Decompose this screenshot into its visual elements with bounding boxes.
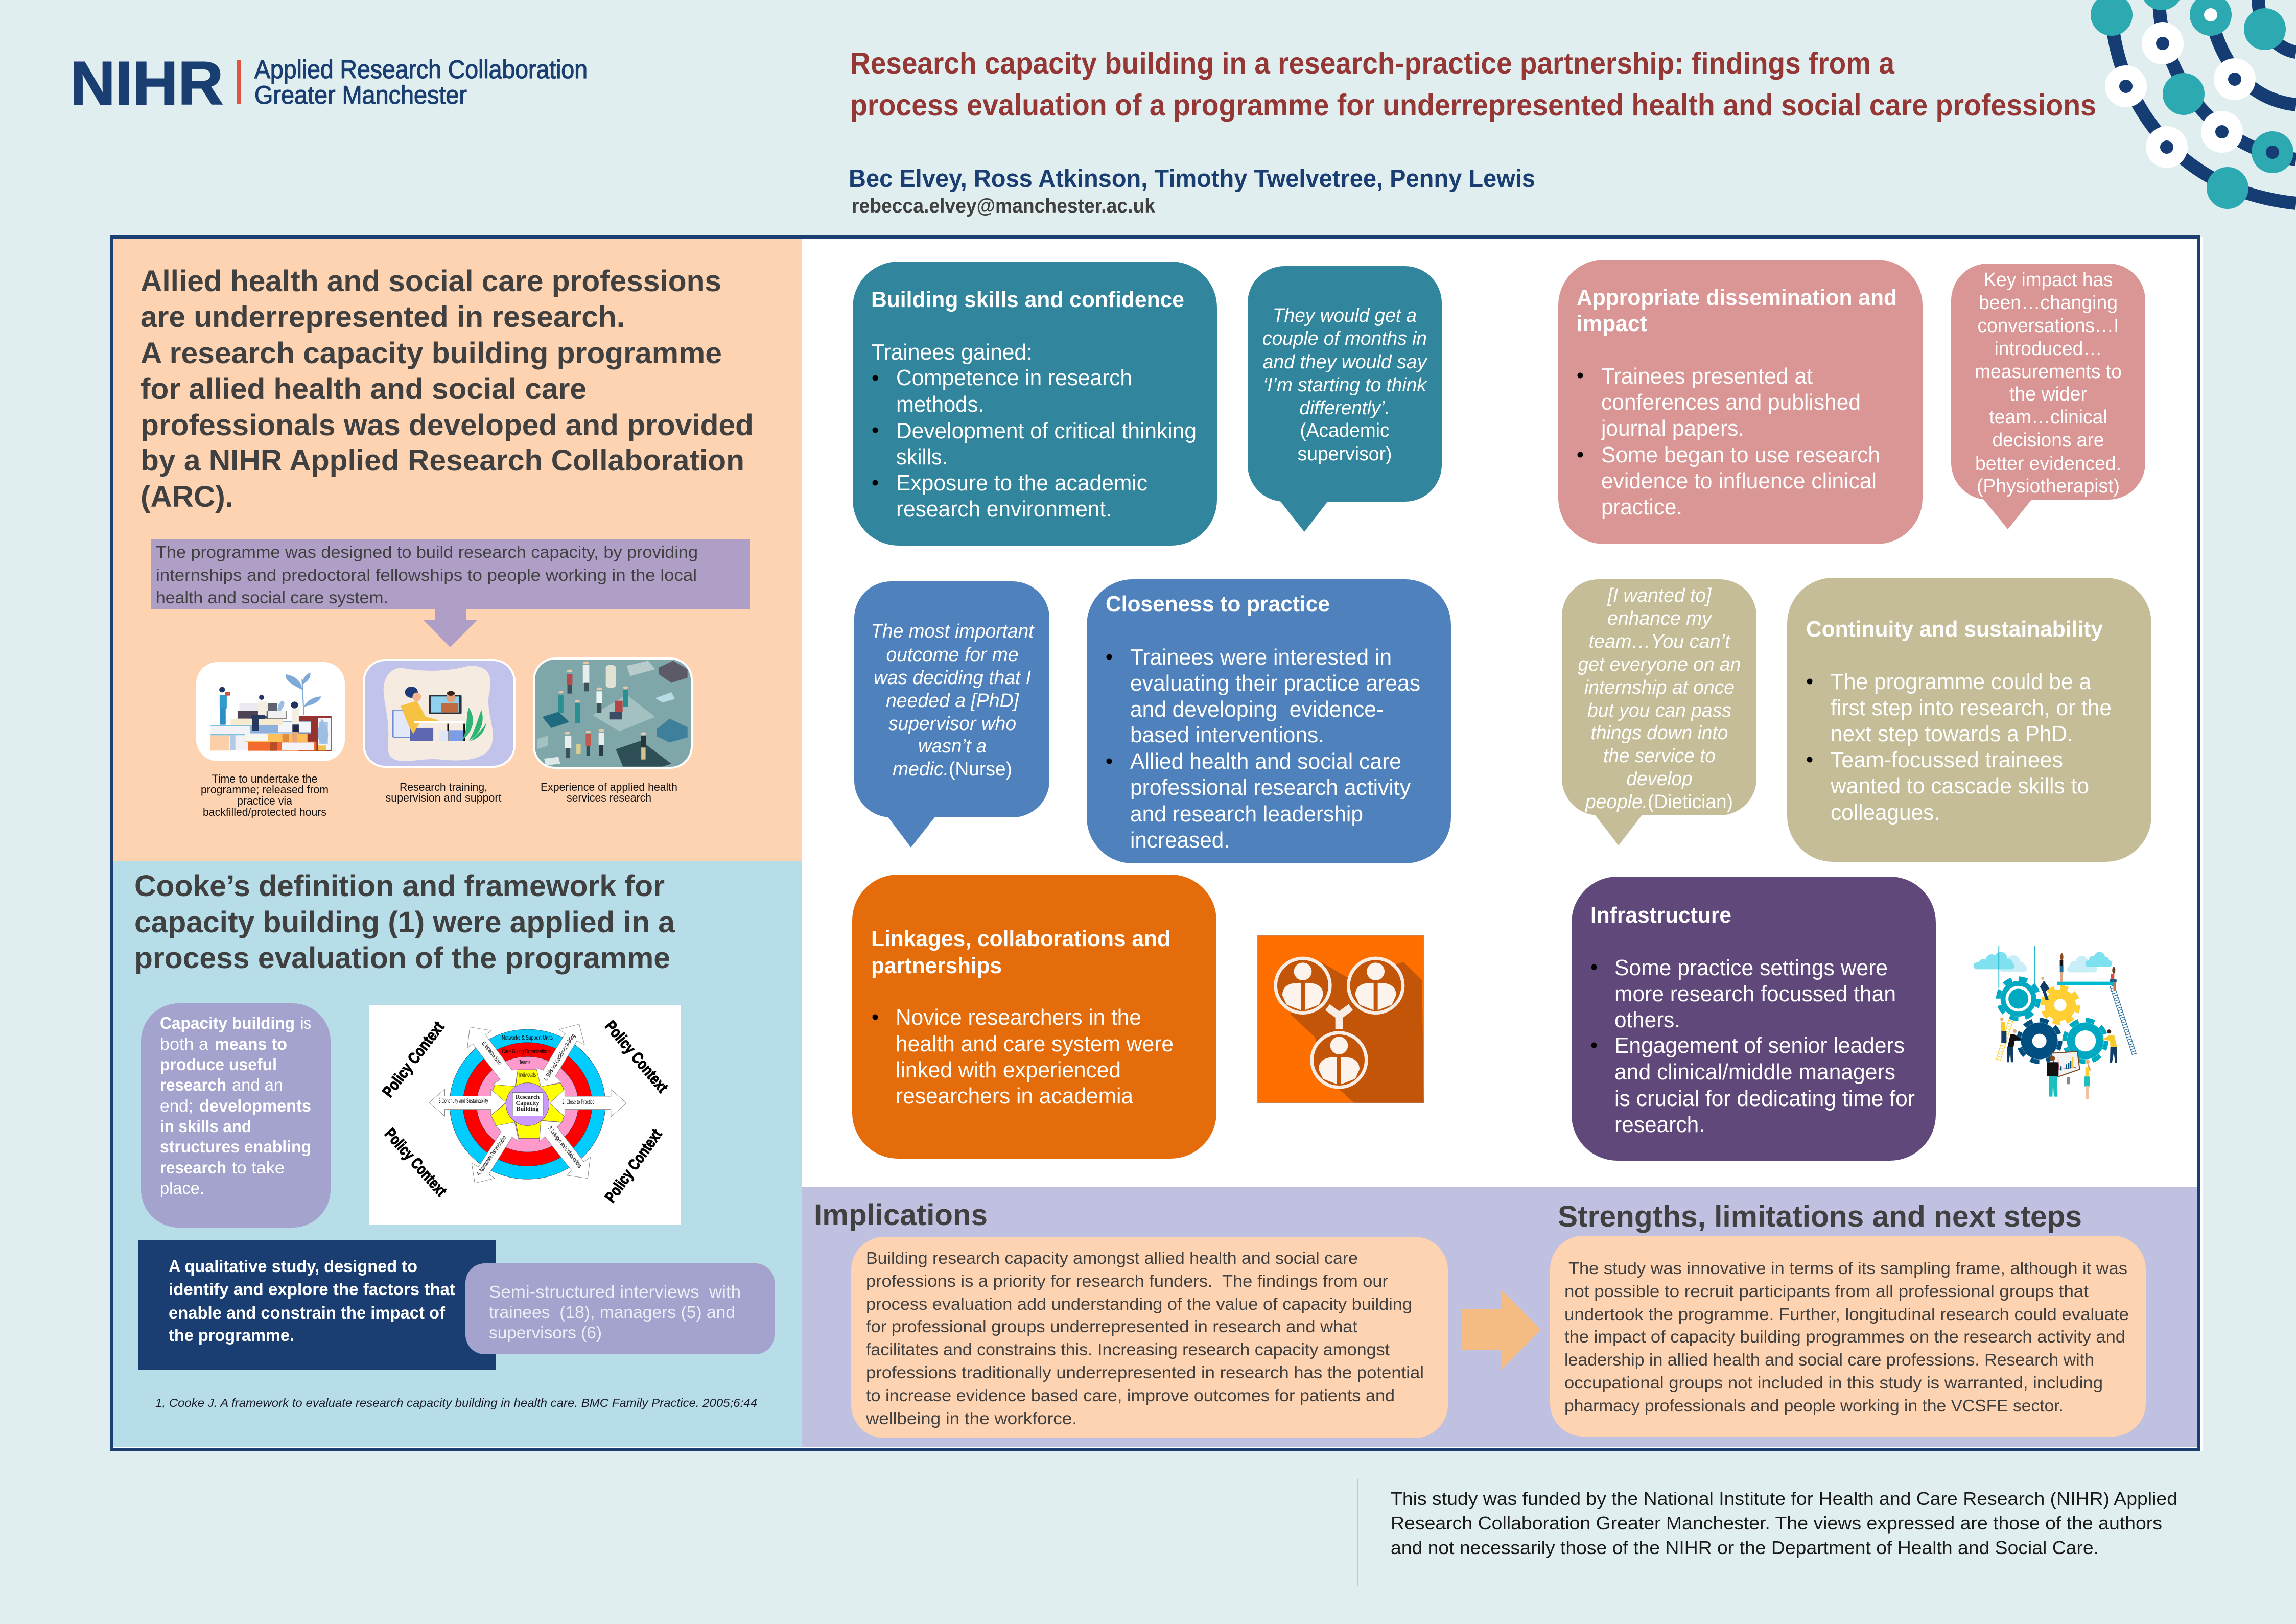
- callout: qualitative study: enable and constrain the impact of: [169, 1303, 446, 1322]
- panel: linkages, collaborations and partnerships: health and care system were: [896, 1032, 1174, 1056]
- quote bubble: nurse: (Nurse): [949, 759, 1012, 780]
- panel: closeness to practice: [1087, 579, 1451, 863]
- panel: infrastructure: more research focussed than: [1614, 982, 1896, 1006]
- heading: Cooke's definition: Cooke’s definition and framework for: [134, 869, 665, 903]
- reference: 1, Cooke J. A framework to evaluate research capacity building in health care. BMC Family Practice. 2005;6:44: [155, 1396, 757, 1409]
- panel: building skills and confidence: Development of critical thinking: [896, 419, 1197, 443]
- panel: building skills and confidence: methods.: [896, 392, 984, 417]
- quote bubble: academic supervisor: (Academic: [1300, 420, 1390, 441]
- diagram labels: [379, 1017, 672, 1206]
- panel: linkages, collaborations and partnerships: Linkages, collaborations and: [871, 927, 1170, 951]
- quote bubble: academic supervisor: supervisor): [1298, 443, 1392, 465]
- heading: Cooke's definition: capacity building (1) were applied in a: [134, 906, 675, 939]
- heading: underrepresentation: (ARC).: [140, 480, 233, 513]
- heading: strengths and limitations: Strengths, limitations and next steps: [1558, 1200, 2082, 1233]
- panel: appropriate dissemination and impact: practice.: [1601, 495, 1682, 520]
- panel: appropriate dissemination and impact: Some began to use research: [1601, 443, 1880, 467]
- panel: infrastructure: is crucial for dedicating time for: [1614, 1087, 1915, 1111]
- heading: underrepresentation: Allied health and social care professions: [140, 265, 721, 298]
- panel: infrastructure: Some practice settings were: [1614, 956, 1888, 980]
- panel: appropriate dissemination and impact: conferences and published: [1601, 390, 1861, 415]
- diagram labels: 3. Linkages and Collaborations: [547, 1125, 583, 1169]
- quote bubble: academic supervisor: They would get a: [1273, 305, 1417, 326]
- panel: continuity and sustainability: [1787, 578, 2151, 862]
- quote bubble: nurse: needed a [PhD]: [886, 690, 1019, 712]
- caption: training: [385, 781, 502, 804]
- callout: capacity building definition: Capacity building: [160, 1014, 295, 1032]
- text block: strengths: the impact of capacity building programmes on the research activity and: [1564, 1327, 2125, 1346]
- panel: continuity and sustainability: The programme could be a: [1831, 670, 2092, 694]
- quote bubble: nurse: [854, 581, 1049, 848]
- chart: Cooke framework diagram: [369, 1005, 681, 1225]
- panel: linkages, collaborations and partnerships: researchers in academia: [896, 1084, 1134, 1109]
- quote bubble: physiotherapist: [1951, 264, 2145, 529]
- callout: qualitative study: [138, 1240, 496, 1370]
- quote bubble: physiotherapist: Key impact has: [1983, 269, 2113, 291]
- heading: underrepresentation: [140, 265, 754, 513]
- text block: implications: wellbeing in the workforce.: [865, 1409, 1077, 1428]
- callout: capacity building definition: [141, 1003, 331, 1228]
- panel: infrastructure: research.: [1614, 1113, 1705, 1137]
- heading: underrepresentation: professionals was developed and provided: [140, 409, 754, 442]
- quote bubble: dietician: [I wanted to]: [1607, 585, 1712, 606]
- panel: closeness to practice: and developing evidence-: [1130, 697, 1384, 722]
- callout: capacity building definition: end;: [160, 1096, 193, 1115]
- quote bubble: nurse: outcome for me: [886, 644, 1019, 666]
- diagram labels: Building: [516, 1105, 539, 1112]
- callout: programme design: internships and predoctoral fellowships to people working in the local: [156, 566, 697, 584]
- text block: strengths: [1550, 1236, 2146, 1437]
- panel: building skills and confidence: Building skills and confidence: [871, 288, 1184, 312]
- quote bubble: academic supervisor: and they would say: [1263, 351, 1427, 373]
- quote bubble: academic supervisor: ‘I’m starting to think: [1263, 374, 1427, 396]
- funding statement: Research Collaboration Greater Manchester. The views expressed are those of the authors: [1391, 1513, 2162, 1534]
- arrow: down: [423, 609, 478, 647]
- quote bubble: physiotherapist: team…clinical: [1989, 407, 2107, 428]
- text block: implications: for professional groups underrepresented in research and what: [866, 1317, 1357, 1336]
- callout: capacity building definition: research: [160, 1075, 226, 1094]
- text block: implications: Building research capacity amongst allied health and social care: [866, 1249, 1358, 1267]
- panel: closeness to practice: and research leadership: [1130, 802, 1363, 827]
- heading: underrepresentation: A research capacity building programme: [140, 337, 722, 370]
- quote bubble: physiotherapist: the wider: [2009, 384, 2087, 405]
- diagram labels: Individuals: [519, 1071, 536, 1078]
- caption: time: Time to undertake the: [212, 772, 318, 785]
- text block: implications: professions traditionally underrepresented in research has the potential: [866, 1363, 1424, 1382]
- callout: qualitative study: identify and explore the factors that: [169, 1280, 455, 1299]
- callout: interviews: supervisors (6): [489, 1323, 602, 1342]
- quote bubble: dietician: enhance my: [1607, 608, 1713, 629]
- panel: closeness to practice: increased.: [1130, 828, 1230, 853]
- quote bubble: nurse: The most important: [871, 621, 1035, 642]
- quote bubble: nurse: wasn’t a: [918, 736, 987, 757]
- panel: appropriate dissemination and impact: evidence to influence clinical: [1601, 469, 1877, 493]
- diagram labels: Policy Context: [379, 1018, 448, 1100]
- caption: experience: [541, 781, 677, 804]
- panel: infrastructure: and clinical/middle managers: [1614, 1060, 1895, 1085]
- quote bubble: nurse: supervisor who: [888, 713, 1016, 735]
- heading: underrepresentation: are underrepresented in research.: [140, 300, 625, 334]
- diagram labels: 2. Close to Practice: [562, 1098, 595, 1105]
- panel: continuity and sustainability: next step towards a PhD.: [1831, 722, 2073, 746]
- panel: linkages, collaborations and partnerships: Novice researchers in the: [896, 1005, 1141, 1030]
- panel: closeness to practice: Closeness to practice: [1106, 592, 1330, 617]
- callout: capacity building definition: is: [300, 1014, 311, 1032]
- panel: infrastructure: others.: [1614, 1008, 1680, 1032]
- callout: programme design: [151, 539, 750, 609]
- panel: background and programme: [113, 239, 802, 861]
- diagram labels: Teams: [519, 1058, 530, 1066]
- quote bubble: physiotherapist: introduced…: [1995, 338, 2102, 360]
- diagram labels: Networks & Support Units: [502, 1034, 553, 1041]
- panel: linkages, collaborations and partnerships: linked with experienced: [896, 1058, 1121, 1082]
- callout: capacity building definition: means to: [215, 1034, 287, 1053]
- text block: strengths: leadership in allied health and social care professions. Research with: [1564, 1350, 2094, 1369]
- quote bubble: physiotherapist: conversations…I: [1977, 315, 2119, 337]
- caption: training: supervision and support: [385, 791, 502, 804]
- diagram labels: Policy Context: [601, 1126, 665, 1206]
- callout: interviews: trainees (18), managers (5) and: [489, 1303, 735, 1322]
- logo: NIHR Applied Research Collaboration: NIHR: [70, 49, 223, 117]
- panel: building skills and confidence: Trainees gained:: [871, 340, 1033, 365]
- callout: capacity building definition: developments: [199, 1096, 311, 1115]
- diagram labels: 4. Appropriate Dissemination: [475, 1134, 508, 1176]
- text block: strengths: The study was innovative in terms of its sampling frame, although it was: [1568, 1259, 2127, 1278]
- callout: capacity building definition: produce useful: [160, 1055, 277, 1074]
- diagram labels: Policy Context: [601, 1017, 672, 1096]
- title: [850, 46, 2096, 122]
- text block: strengths: undertook the programme. Further, longitudinal research could evaluate: [1564, 1305, 2129, 1324]
- panel: continuity and sustainability: Continuity and sustainability: [1806, 617, 2103, 642]
- panel: appropriate dissemination and impact: Appropriate dissemination and: [1577, 286, 1897, 310]
- quote bubble: academic supervisor: [1248, 266, 1442, 532]
- diagram labels: Capacity: [516, 1099, 540, 1107]
- panel: infrastructure: Engagement of senior leaders: [1614, 1033, 1905, 1058]
- funding statement: This study was funded by the National Institute for Health and Care Research (NIHR) Applied: [1391, 1488, 2177, 1509]
- callout: capacity building definition: both a: [160, 1034, 209, 1053]
- quote bubble: dietician: but you can pass: [1587, 700, 1731, 721]
- quote bubble: physiotherapist: (Physiotherapist): [1977, 476, 2120, 497]
- text block: implications: to increase evidence based care, improve outcomes for patients and: [866, 1386, 1395, 1405]
- quote bubble: dietician: get everyone on an: [1578, 654, 1741, 675]
- text block: implications: professions is a priority for research funders. The findings from our: [866, 1272, 1388, 1290]
- quote bubble: physiotherapist: decisions are: [1993, 430, 2104, 451]
- panel: implications and next steps: [802, 1187, 2197, 1447]
- contact email: rebecca.elvey@manchester.ac.uk: [852, 195, 1155, 217]
- callout: capacity building definition: research: [160, 1158, 226, 1177]
- caption: time: programme; released from: [201, 783, 329, 796]
- heading: underrepresentation: for allied health and social care: [140, 372, 587, 406]
- diagram labels: 1. Skills and Confidence Building: [542, 1032, 577, 1082]
- main frame: [111, 237, 2203, 1451]
- diagram labels: Research: [516, 1093, 540, 1100]
- callout: capacity building definition: place.: [160, 1179, 204, 1197]
- quote bubble: academic supervisor: couple of months in: [1262, 328, 1427, 349]
- quote bubble: dietician: internship at once: [1584, 677, 1735, 698]
- caption: time: practice via: [237, 794, 293, 807]
- callout: capacity building definition: structures enabling: [160, 1137, 311, 1156]
- icon: applied health services scene card: [534, 658, 692, 768]
- authors: Bec Elvey, Ross Atkinson, Timothy Twelvetree, Penny Lewis: [849, 165, 1535, 193]
- icon: linked people network: [1258, 935, 1424, 1103]
- title: process evaluation of a programme for underrepresented health and social care professions: [850, 88, 2096, 122]
- caption: experience: services research: [567, 791, 651, 804]
- diagram labels: Policy Context: [381, 1125, 451, 1199]
- text block: strengths: not possible to recruit participants from all professional groups that: [1564, 1282, 2089, 1301]
- panel: closeness to practice: professional research activity: [1130, 775, 1411, 800]
- quote bubble: dietician: people.: [1585, 791, 1648, 813]
- heading: Cooke's definition: process evaluation of the programme: [134, 942, 670, 975]
- quote bubble: dietician: the service to: [1603, 745, 1716, 767]
- quote bubble: dietician: develop: [1627, 768, 1692, 790]
- quote bubble: dietician: things down into: [1591, 722, 1728, 744]
- logo: NIHR Applied Research Collaboration: Applied Research Collaboration: [254, 55, 588, 84]
- panel: closeness to practice: evaluating their practice areas: [1130, 671, 1420, 696]
- panel: closeness to practice: based interventions.: [1130, 723, 1324, 747]
- caption: training: Research training,: [400, 781, 487, 793]
- panel: appropriate dissemination and impact: impact: [1577, 312, 1647, 336]
- callout: capacity building definition: and an: [232, 1075, 283, 1094]
- panel: closeness to practice: Trainees were interested in: [1130, 645, 1392, 670]
- panel: appropriate dissemination and impact: journal papers.: [1600, 416, 1744, 441]
- panel: building skills and confidence: skills.: [896, 445, 948, 469]
- heading: Cooke's definition: [134, 869, 675, 975]
- panel: infrastructure: [1572, 877, 1936, 1161]
- callout: capacity building definition: to take: [232, 1158, 285, 1177]
- funding statement: [1357, 1479, 2177, 1586]
- panel: continuity and sustainability: Team-focussed trainees: [1831, 748, 2063, 772]
- panel: building skills and confidence: Exposure to the academic: [896, 471, 1147, 496]
- panel: building skills and confidence: [853, 262, 1217, 546]
- caption: time: backfilled/protected hours: [203, 806, 326, 818]
- panel: Cooke's framework and methods: [113, 861, 802, 1447]
- heading: underrepresentation: by a NIHR Applied Research Collaboration: [140, 444, 744, 477]
- quote bubble: dietician: team…You can’t: [1589, 631, 1731, 652]
- quote bubble: physiotherapist: been…changing: [1979, 292, 2118, 314]
- callout: qualitative study: the programme.: [169, 1326, 294, 1345]
- quote bubble: physiotherapist: better evidenced.: [1975, 453, 2121, 475]
- quote bubble: dietician: (Dietician): [1648, 791, 1733, 813]
- panel: linkages, collaborations and partnerships: partnerships: [871, 954, 1002, 978]
- text block: implications: process evaluation add understanding of the value of capacity building: [866, 1295, 1412, 1313]
- panel: continuity and sustainability: colleagues.: [1831, 801, 1940, 825]
- caption: experience: Experience of applied health: [541, 781, 677, 793]
- panel: appropriate dissemination and impact: Trainees presented at: [1601, 364, 1813, 389]
- icon: books and staff card: [196, 662, 345, 761]
- panel: building skills and confidence: research environment.: [896, 497, 1112, 522]
- icon: video call card: [364, 660, 514, 767]
- panel: infrastructure: Infrastructure: [1590, 903, 1731, 928]
- logo: NIHR Applied Research Collaboration: Greater Manchester: [254, 81, 467, 109]
- title: Research capacity building in a research-practice partnership: findings from a: [850, 46, 1895, 80]
- caption: time: [201, 772, 329, 818]
- diagram labels: 5.Continuity and Sustainability: [438, 1097, 488, 1104]
- icon: gears and team: [1974, 946, 2137, 1099]
- text block: strengths: occupational groups not included in this study is warranted, including: [1564, 1373, 2103, 1392]
- callout: programme design: health and social care system.: [156, 588, 388, 607]
- text block: strengths: pharmacy professionals and people working in the VCSFE sector.: [1564, 1396, 2064, 1415]
- panel: appropriate dissemination and impact: [1558, 260, 1923, 544]
- quote bubble: dietician: [1562, 579, 1756, 845]
- diagram labels: Care Giving Organisations: [502, 1048, 551, 1055]
- callout: interviews: Semi-structured interviews with: [489, 1282, 741, 1301]
- diagram labels: 6. Infrastructures: [480, 1040, 504, 1066]
- panel: linkages, collaborations and partnerships: [852, 875, 1216, 1159]
- quote bubble: physiotherapist: measurements to: [1975, 361, 2122, 383]
- quote bubble: nurse: medic.: [893, 759, 949, 780]
- panel: closeness to practice: Allied health and social care: [1130, 749, 1401, 774]
- decorative network of dots: [2091, 0, 2296, 209]
- arrow: implications to next steps: [1462, 1290, 1541, 1370]
- funding statement: and not necessarily those of the NIHR or the Department of Health and Social Care.: [1391, 1537, 2099, 1558]
- callout: capacity building definition: in skills and: [160, 1117, 251, 1136]
- quote bubble: academic supervisor: differently’.: [1300, 397, 1390, 419]
- quote bubble: nurse: was deciding that I: [874, 667, 1031, 689]
- text block: implications: [851, 1237, 1448, 1438]
- panel: continuity and sustainability: wanted to cascade skills to: [1830, 774, 2089, 798]
- panel: building skills and confidence: Competence in research: [896, 366, 1132, 390]
- callout: programme design: The programme was designed to build research capacity, by providing: [156, 543, 698, 561]
- panel: continuity and sustainability: first step into research, or the: [1831, 696, 2112, 720]
- logo: NIHR Applied Research Collaboration: [70, 49, 588, 117]
- callout: qualitative study: A qualitative study, designed to: [169, 1257, 417, 1276]
- callout: interviews: [465, 1263, 775, 1354]
- heading: implications: Implications: [814, 1198, 988, 1232]
- text block: implications: facilitates and constrains this. Increasing research capacity amongst: [866, 1340, 1390, 1359]
